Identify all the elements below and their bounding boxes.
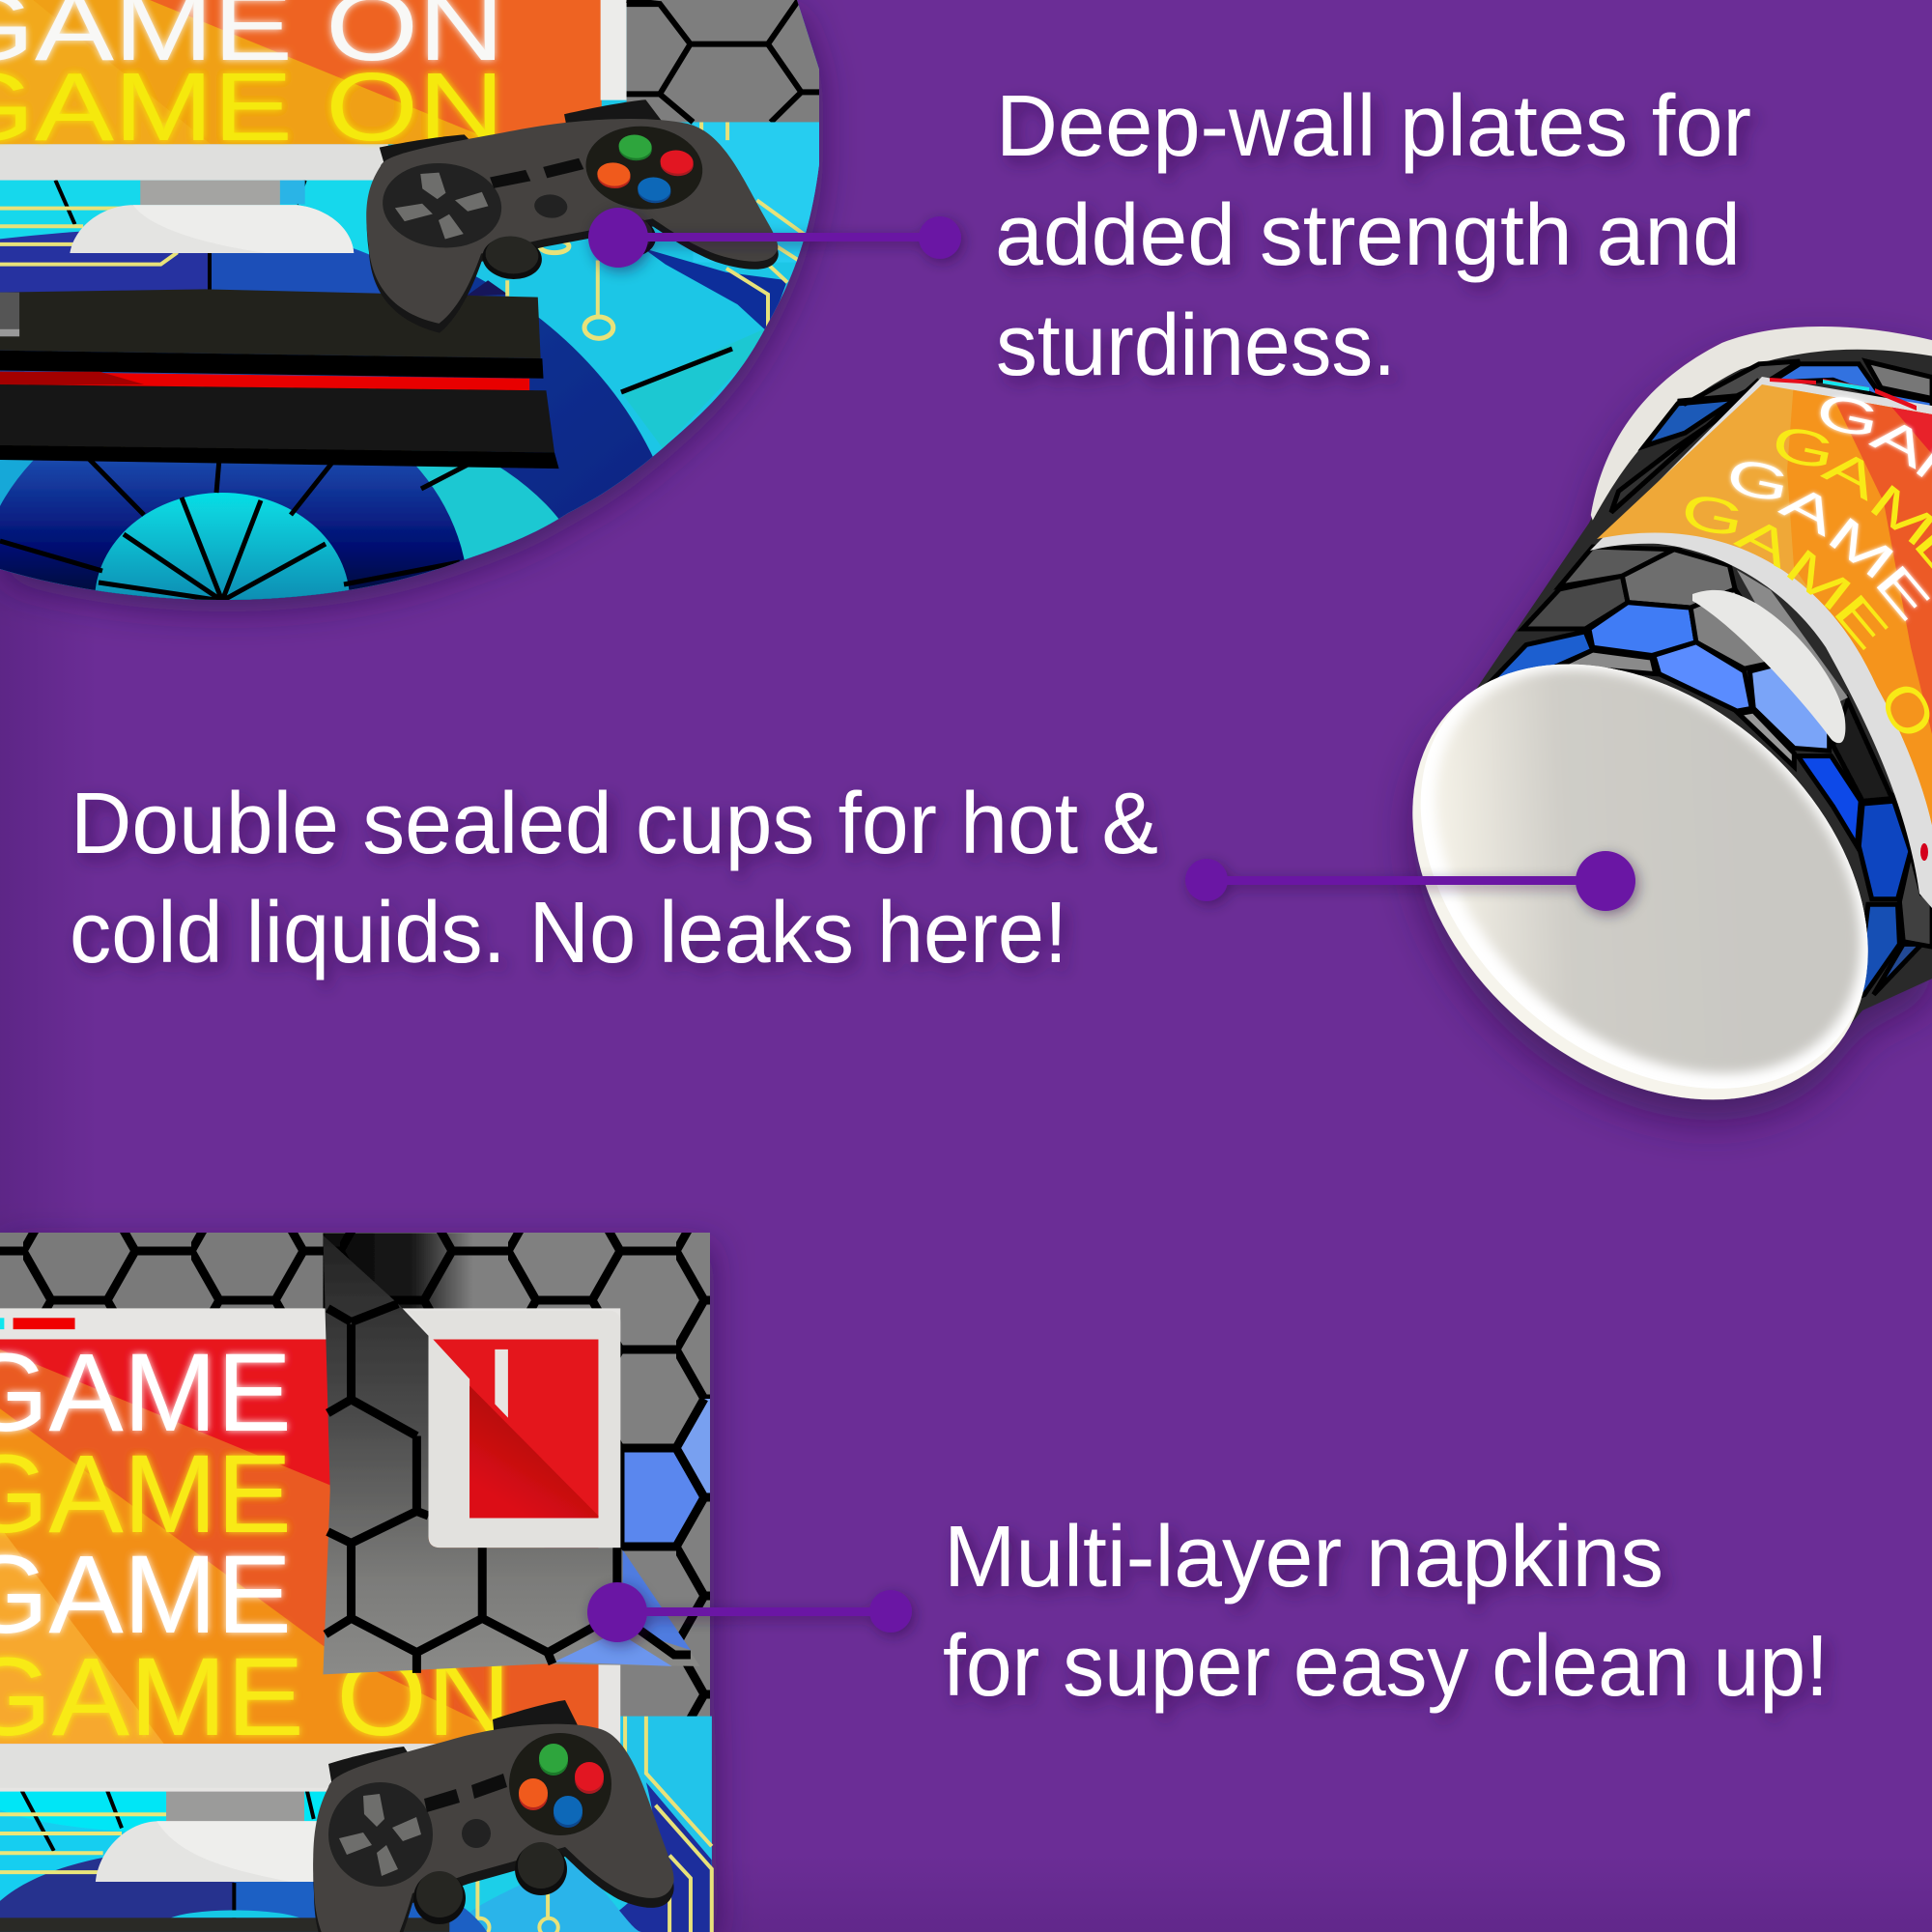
napkin lower artwork <box>0 1308 712 1932</box>
text: double sealed cups: Double sealed cups for hot & <box>71 776 1158 872</box>
cup label text: G <box>1721 446 1795 514</box>
text: deep-wall plates: Deep-wall plates for <box>996 78 1751 175</box>
icon: game controller on plate <box>359 96 783 338</box>
napkin screen text: game on <box>0 1331 511 1759</box>
plate background rings <box>0 0 819 630</box>
text: deep-wall plates: added strength and <box>995 187 1741 284</box>
cup label text: A <box>1815 437 1889 511</box>
cup body <box>1452 327 1932 1053</box>
cup label text: G <box>1676 481 1749 549</box>
screen text: game on <box>0 0 504 161</box>
text: deep-wall plates <box>995 78 1751 394</box>
text: double sealed cups <box>70 776 1158 981</box>
connector: plate callout <box>588 208 961 268</box>
connector: napkin callout <box>587 1582 912 1642</box>
icon: game controller on napkin <box>313 1700 674 1932</box>
text: multi-layer napkins: for super easy clean up! <box>943 1618 1829 1715</box>
cup label text: E <box>1823 582 1900 660</box>
cup label text: G <box>1767 413 1840 481</box>
panel: deep-wall plate <box>0 0 840 630</box>
napkin screen and frame <box>0 1308 620 1792</box>
cup label text: M <box>1818 505 1905 590</box>
cup label text: A <box>1773 472 1847 547</box>
cup label text <box>1685 396 1932 734</box>
cup label text: M <box>1776 537 1862 622</box>
text: deep-wall plates: sturdiness. <box>996 298 1396 394</box>
monitor screen <box>0 0 821 414</box>
napkin background <box>0 1233 710 1718</box>
cup label text: A <box>1728 504 1803 579</box>
game console stripes <box>0 289 559 469</box>
text: double sealed cups: cold liquids. No leaks here! <box>70 885 1067 981</box>
panel: paper cup <box>1393 327 1932 1141</box>
panel: folded napkin <box>0 1233 712 1932</box>
napkin fold flap <box>323 1234 700 1674</box>
cup label panel <box>1590 377 1932 908</box>
text: multi-layer napkins <box>943 1509 1829 1715</box>
text: multi-layer napkins: Multi-layer napkins <box>944 1509 1663 1605</box>
cup label text: G <box>1811 382 1885 449</box>
cup base disc <box>1393 665 1868 1141</box>
connector: cup callout <box>1185 851 1635 911</box>
